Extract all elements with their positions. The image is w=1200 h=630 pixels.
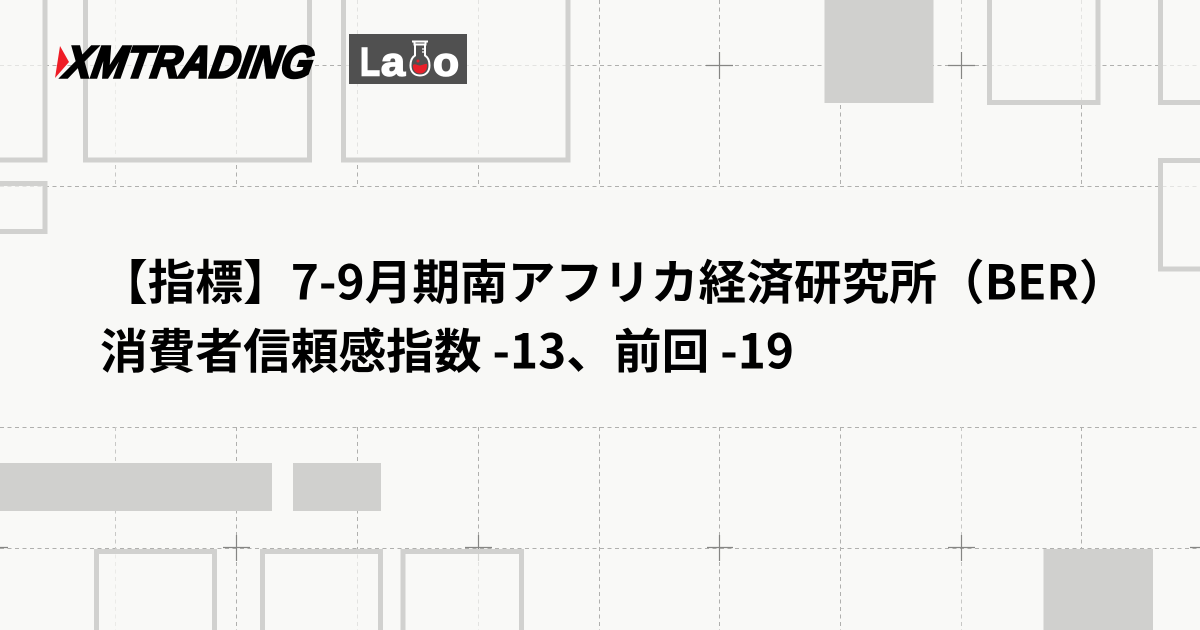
logo: XMTRADING: XMTRADING [59,37,318,87]
logo: Lab: a [381,40,406,84]
title [100,244,1127,382]
logo: Lab: L [360,40,380,84]
logo: Lab: o [433,40,459,84]
logo: Lab [349,34,467,84]
title panel [50,190,1150,425]
title: 【指標】7-9月期南アフリカ経済研究所（BER） [100,244,1127,314]
title: 消費者信頼感指数 -13、前回 -19 [100,314,794,382]
icon: flask [410,42,430,76]
background outlined squares, bottom row [96,552,522,630]
background outlined squares, top row [0,0,1200,269]
